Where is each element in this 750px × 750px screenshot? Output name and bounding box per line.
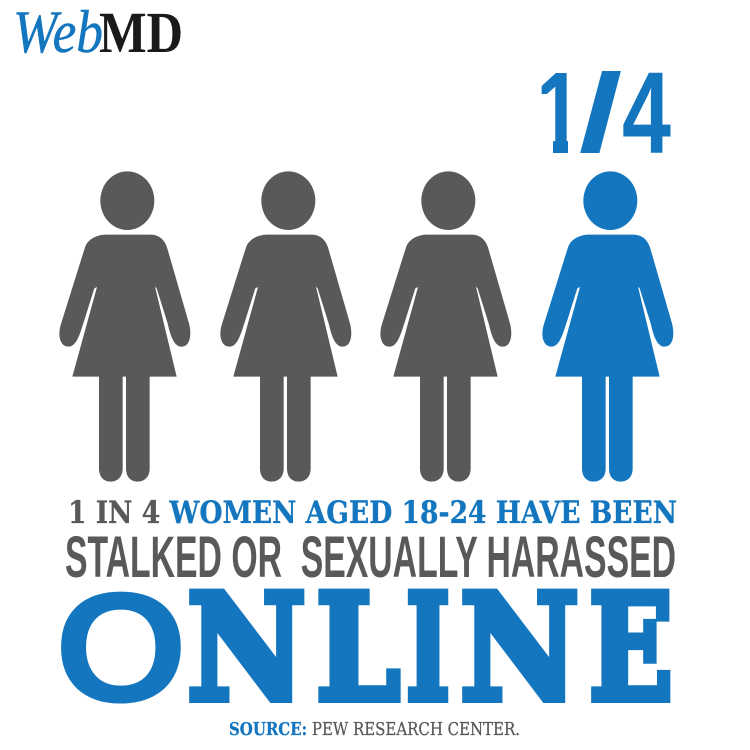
- logo: WebMD: Web: [13, 0, 103, 65]
- figure 1: woman gray: [59, 171, 190, 482]
- headline: ONLINE: O: [54, 560, 188, 736]
- logo: WebMD: [13, 0, 183, 65]
- figure 4: woman blue highlighted: [542, 171, 673, 482]
- fraction: 1/4: 1: [536, 48, 582, 178]
- headline: ONLINE: N: [460, 563, 579, 734]
- headline: ONLINE: N: [187, 563, 306, 734]
- logo: WebMD: MD: [99, 0, 183, 65]
- fraction: 1/4: 4: [622, 48, 671, 178]
- headline line 1: 1 IN 4 WOMEN AGED 18-24 HAVE BEEN: [68, 495, 677, 531]
- source line: SOURCE: PEW RESEARCH CENTER.: [229, 719, 520, 740]
- headline: ONLINE: L: [316, 563, 400, 734]
- headline: ONLINE: E: [589, 563, 673, 734]
- fraction: 1/4: /: [578, 48, 623, 178]
- fraction: 1/4: [542, 71, 670, 153]
- figure 3: woman gray: [380, 171, 511, 482]
- figure 2: woman gray: [220, 171, 351, 482]
- headline: ONLINE: I: [406, 563, 450, 734]
- headline: ONLINE: [54, 560, 673, 736]
